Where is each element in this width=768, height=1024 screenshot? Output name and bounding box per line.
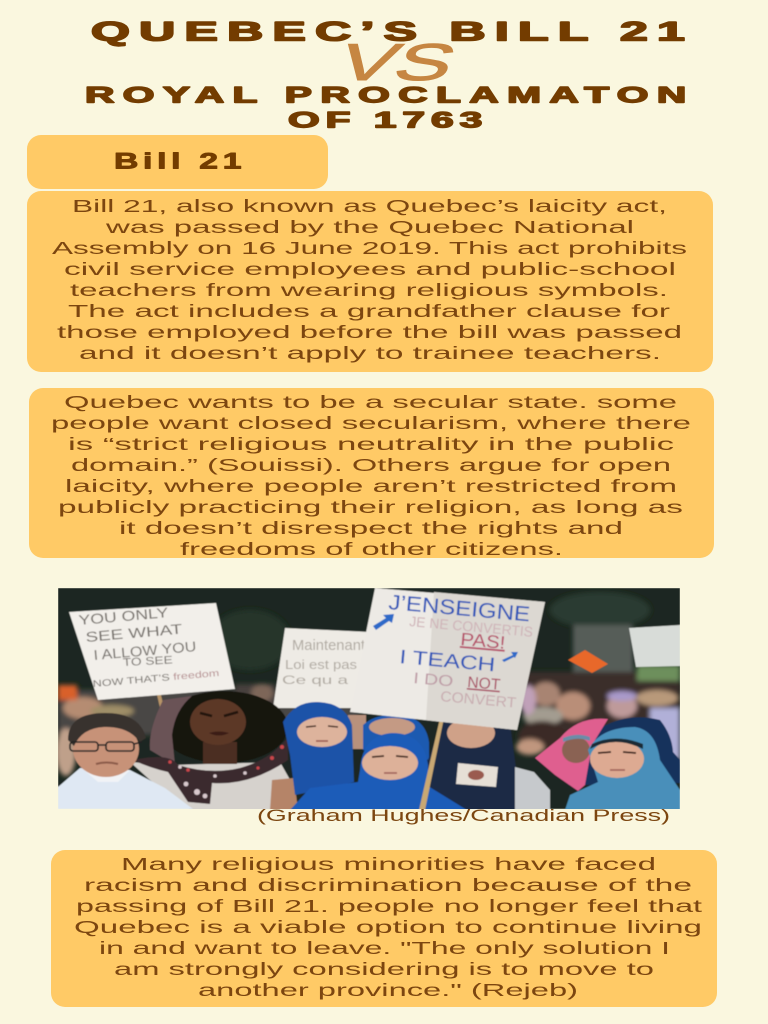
title line: Of 1763: OF 1763 [288,107,482,132]
title [85,16,686,132]
man in glasses [58,713,193,809]
panel: Bill 21 description: Bill 21, also known as Quebec’s laicity act, [72,196,667,216]
woman in teal hijab [565,727,680,810]
panel: secularism debate: publicly practicing their religion, as long as [58,497,683,517]
sign pole [419,718,444,810]
panel: secularism debate [29,388,714,559]
panel: impact on religious minorities: racism and discrimination because of the [84,875,692,895]
orange sign, blurred [568,650,608,673]
sign: you only see what I allow you to see: YOU ONLY [78,604,170,628]
panel: impact on religious minorities [51,850,717,1007]
photo: protest crowd with signs [56,588,680,810]
panel: secularism debate: Quebec wants to be a secular state. some [64,392,677,412]
sign: J'enseigne, I teach: PAS! [460,629,506,653]
blue arrows on sign [373,614,394,630]
sign: middle, handwritten: Loi est pas [285,657,358,672]
sign stick [156,694,163,707]
title line: Royal Proclamaton: ROYAL PROCLAMATON [85,82,686,107]
panel: Bill 21 description: those employed before the bill was passed [57,322,682,342]
sign: J'enseigne, I teach: NOT [467,674,502,694]
panel: Bill 21 description: was passed by the Quebec National [104,217,634,237]
sign: you only see what I allow you to see: NOW THAT’S freedom [92,668,220,690]
panel: impact on religious minorities: passing of Bill 21. people no longer feel that [76,896,702,916]
sign: you only see what I allow you to see: SEE WHAT [85,621,183,645]
woman in pink hijab [535,719,608,791]
woman in blue hijab, rear [363,715,429,760]
panel: Bill 21 description: and it doesn’t apply to trainee teachers. [79,343,661,363]
panel: Bill 21 description [27,191,713,372]
sign: J'enseigne, I teach: I TEACH [399,646,496,676]
panel: secularism debate: domain.” (Souissi). Others argue for open [71,455,671,475]
panel: secularism debate: people want closed secularism, where there [51,413,691,433]
panel: secularism debate: is “strict religious neutrality in the public [68,434,674,454]
panel: secularism debate: laicity, where people aren’t restricted from [65,476,677,496]
sign: middle, handwritten [273,628,370,708]
woman in navy hijab, rear right [568,717,680,785]
sign: middle, handwritten: Maintenant [292,637,366,654]
sign: J'enseigne, I teach [350,588,545,730]
panel: Bill 21 description: The act includes a grandfather clause for [68,301,670,321]
woman in dark hijab with badge [422,718,550,810]
bystander skin patch [348,715,366,749]
woman with braids and scarf [130,691,298,810]
sign: J'enseigne, I teach: J’ENSEIGNE [388,591,531,626]
sign: you only see what I allow you to see: TO SEE [123,654,173,669]
panel: Bill 21 description: civil service employees and public-school [64,259,676,279]
sign: J'enseigne, I teach: I DO [413,670,454,690]
sign: middle, handwritten: Ce qu a [282,673,349,687]
heading tab: Bill 21: Bill 21 [114,149,242,174]
woman in blue hijab, front [290,733,467,810]
woman in blue hijab, left [283,702,354,795]
panel: secularism debate: it doesn’t disrespect the rights and [119,518,623,538]
panel: secularism debate: freedoms of other citizens. [180,539,563,559]
panel: impact on religious minorities: another province." (Rejeb) [198,980,578,1000]
panel: Bill 21 description: teachers from wearing religious symbols. [70,280,668,300]
panel: impact on religious minorities: Quebec is a viable option to continue living [74,917,702,937]
panel: impact on religious minorities: am strongly considering is to move to [114,959,654,979]
sign: J'enseigne, I teach: CONVERT [440,689,517,712]
sign: you only see what I allow you to see [69,603,235,700]
blurred background: trees, building and crowd [56,592,680,776]
photo credit caption: (Graham Hughes/Canadian Press) [257,806,670,825]
heading tab: Bill 21 [27,135,328,189]
title line: Quebec's Bill 21: QUEBEC’S BILL 21 [91,16,685,47]
panel: Bill 21 description: Assembly on 16 June 2019. This act prohibits [52,238,687,258]
sign: J'enseigne, I teach: JE NE CONVERTIS [409,613,534,640]
panel: impact on religious minorities: Many religious minorities have faced [121,854,656,874]
title word: VS: VS [329,33,465,91]
right background sign [629,625,680,667]
panel: impact on religious minorities: in and want to leave. "The only solution I [99,938,670,958]
sign: you only see what I allow you to see: I ALLOW YOU [93,638,197,663]
